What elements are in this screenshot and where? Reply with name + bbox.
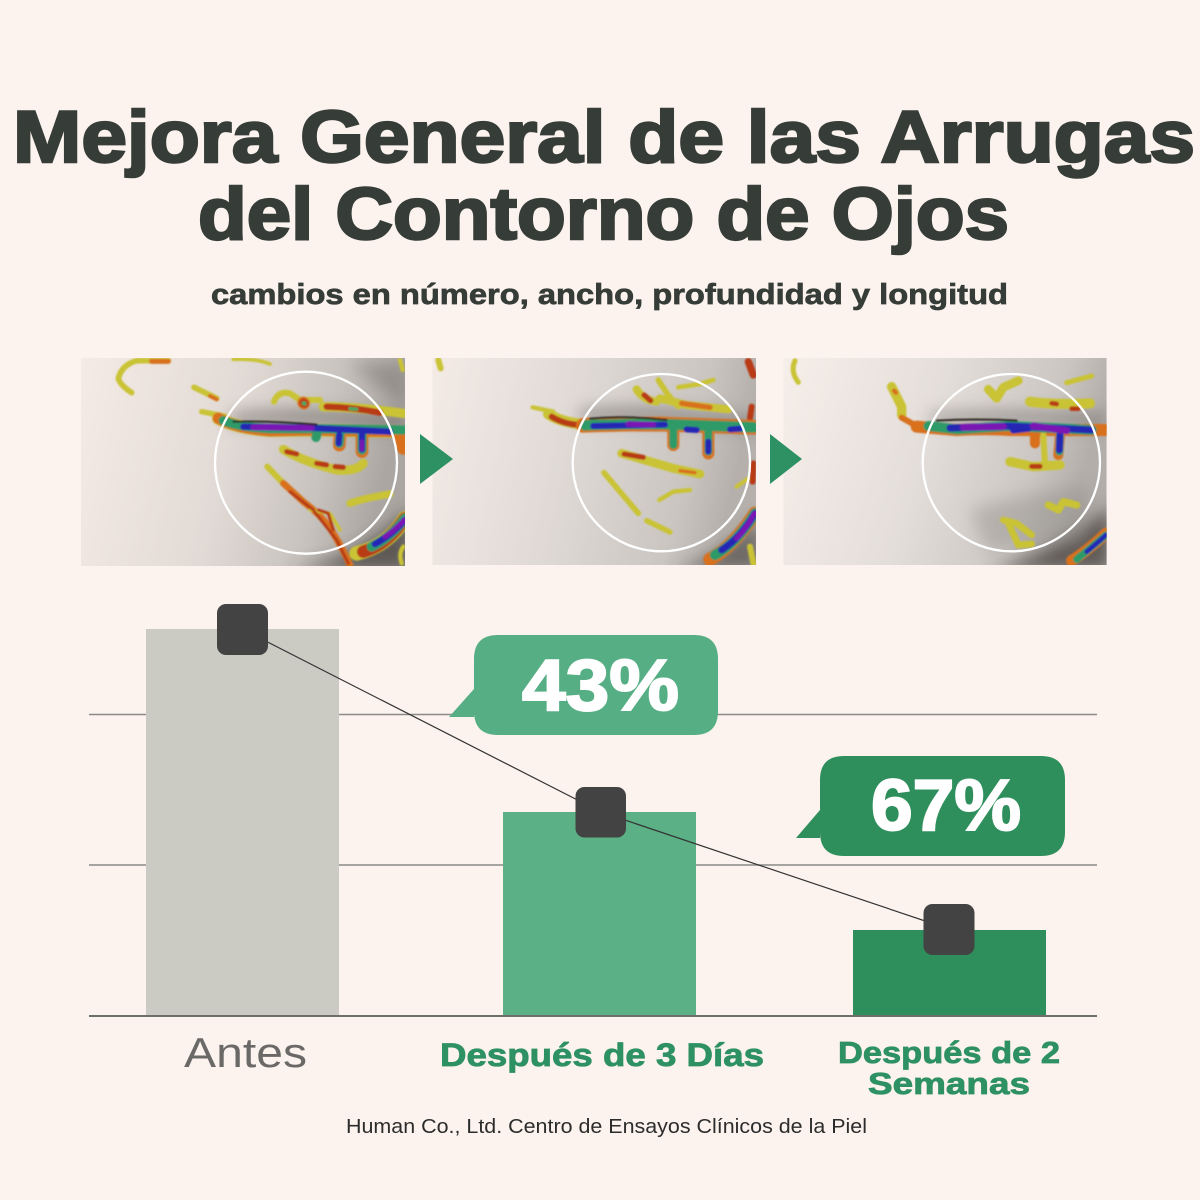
photo: before: [81, 358, 410, 570]
label: after 2 weeks: [838, 1035, 1060, 1101]
bar chart: [89, 604, 1097, 1016]
label: after 2 weeks: Semanas: [868, 1066, 1030, 1101]
main crease: [917, 427, 1105, 430]
bar: before: [146, 629, 339, 1016]
marker: before: [217, 604, 268, 655]
circle highlight: [215, 372, 397, 554]
title: Mejora General de las Arrugas: [13, 97, 1195, 178]
lower lash line: [710, 513, 755, 559]
photo: after 2 weeks: [783, 358, 1110, 570]
main crease: [218, 418, 403, 432]
trend line: [242, 629, 949, 929]
lower lash line: [1072, 533, 1106, 561]
subtitle: cambios en número, ancho, profundidad y longitud: [211, 279, 1008, 311]
source note: Human Co., Ltd. Centro de Ensayos Clínicos de la Piel: [346, 1116, 867, 1138]
bar: after 2 weeks: [853, 930, 1046, 1016]
wrinkle traces: [793, 361, 798, 382]
lower lash line: [357, 518, 405, 553]
wrinkle traces: [118, 361, 168, 393]
marker: after 2 weeks: [924, 904, 974, 955]
circle highlight: [573, 374, 750, 551]
title: [13, 97, 1195, 255]
label: after 3 days: Después de 3 Días: [440, 1037, 764, 1073]
circle highlight: [923, 374, 1100, 551]
arrow: first: [420, 434, 453, 484]
main crease: [583, 424, 753, 427]
wrinkle traces: [438, 360, 441, 368]
arrow: second: [770, 434, 802, 484]
photo: after 3 days: [432, 358, 760, 570]
callout: 67%: [796, 756, 1065, 856]
callout: 67%: 67%: [871, 766, 1021, 846]
bar: after 3 days: [503, 812, 696, 1016]
label: after 2 weeks: Después de 2: [838, 1035, 1060, 1070]
marker: after 3 days: [576, 787, 626, 838]
label: before: Antes: [184, 1029, 307, 1076]
callout: 43%: [449, 635, 718, 735]
callout: 43%: 43%: [522, 646, 679, 726]
title: del Contorno de Ojos: [198, 174, 1009, 255]
